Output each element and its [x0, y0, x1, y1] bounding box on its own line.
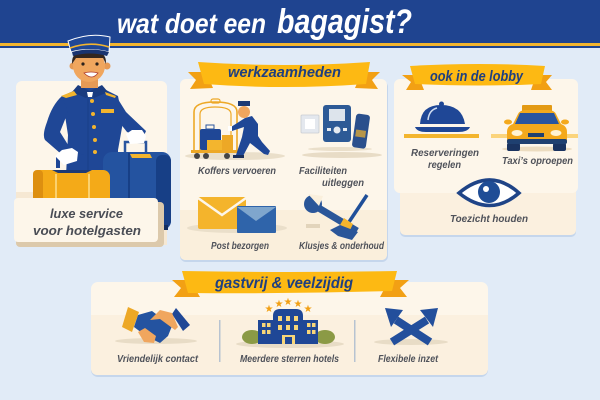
caption box — [14, 198, 164, 247]
label: Flexibele inzet — [378, 353, 438, 365]
label: uitleggen — [322, 177, 364, 189]
ribbon: ook in de lobby — [402, 64, 552, 90]
icon: cloche — [404, 102, 479, 138]
label: Meerdere sterren hotels — [240, 353, 339, 365]
panel: ook in de lobby — [394, 64, 578, 237]
icon: hotel with stars — [236, 297, 344, 348]
label: Taxi’s oproepen — [502, 155, 573, 167]
label: Toezicht houden — [450, 213, 528, 225]
caption box: voor hotelgasten — [33, 223, 141, 238]
icon: envelopes — [187, 197, 287, 233]
label: Post bezorgen — [211, 240, 269, 252]
icon shadow — [374, 339, 448, 345]
icon: eye — [459, 180, 519, 206]
panel: bagagist portrait — [14, 35, 171, 247]
ribbon: ook in de lobby: ook in de lobby — [430, 68, 524, 85]
label: regelen — [428, 159, 461, 171]
label: Reserveringen — [411, 147, 479, 159]
panel: werkzaamheden — [180, 62, 388, 262]
ribbon: gastvrij & veelzijdig — [172, 271, 409, 297]
icon: blue suitcase — [103, 142, 171, 230]
icon: taxi — [491, 105, 578, 152]
hat — [68, 35, 110, 52]
title: bagagist? — [277, 3, 412, 41]
icon: crossed arrows — [385, 308, 438, 342]
ribbon: werkzaamheden — [188, 62, 380, 89]
label: Faciliteiten — [299, 165, 347, 177]
title: wat doet een — [117, 8, 266, 39]
icon: hotel with stars: ★ — [265, 304, 274, 315]
figure: porter — [44, 35, 146, 176]
header band — [0, 0, 600, 48]
divider — [219, 320, 220, 362]
title — [117, 3, 412, 41]
icon: hotel with stars: ★ — [304, 304, 313, 315]
icon: hotel with stars: ★ — [284, 297, 293, 308]
icon: handshake — [115, 307, 197, 344]
panel: gastvrij & veelzijdig — [91, 271, 488, 377]
label: Klusjes & onderhoud — [299, 240, 384, 252]
icon: porter with luggage cart — [185, 99, 285, 160]
icon: hotel with stars: ★ — [275, 299, 284, 310]
icon: switch, panel and remote — [301, 105, 382, 158]
icon: wrench and broom — [304, 194, 367, 240]
label: Koffers vervoeren — [198, 165, 276, 177]
icon: yellow suitcase — [33, 154, 110, 210]
icon: hotel with stars: ★ — [294, 299, 303, 310]
caption box: luxe service — [50, 206, 123, 221]
divider — [354, 320, 356, 362]
icon: gloved hand — [55, 148, 78, 165]
ribbon: gastvrij & veelzijdig: gastvrij & veelzijdig — [214, 275, 353, 292]
icon: gloved hand right — [126, 130, 146, 144]
ribbon: werkzaamheden: werkzaamheden — [228, 64, 341, 81]
label: Vriendelijk contact — [117, 353, 198, 365]
